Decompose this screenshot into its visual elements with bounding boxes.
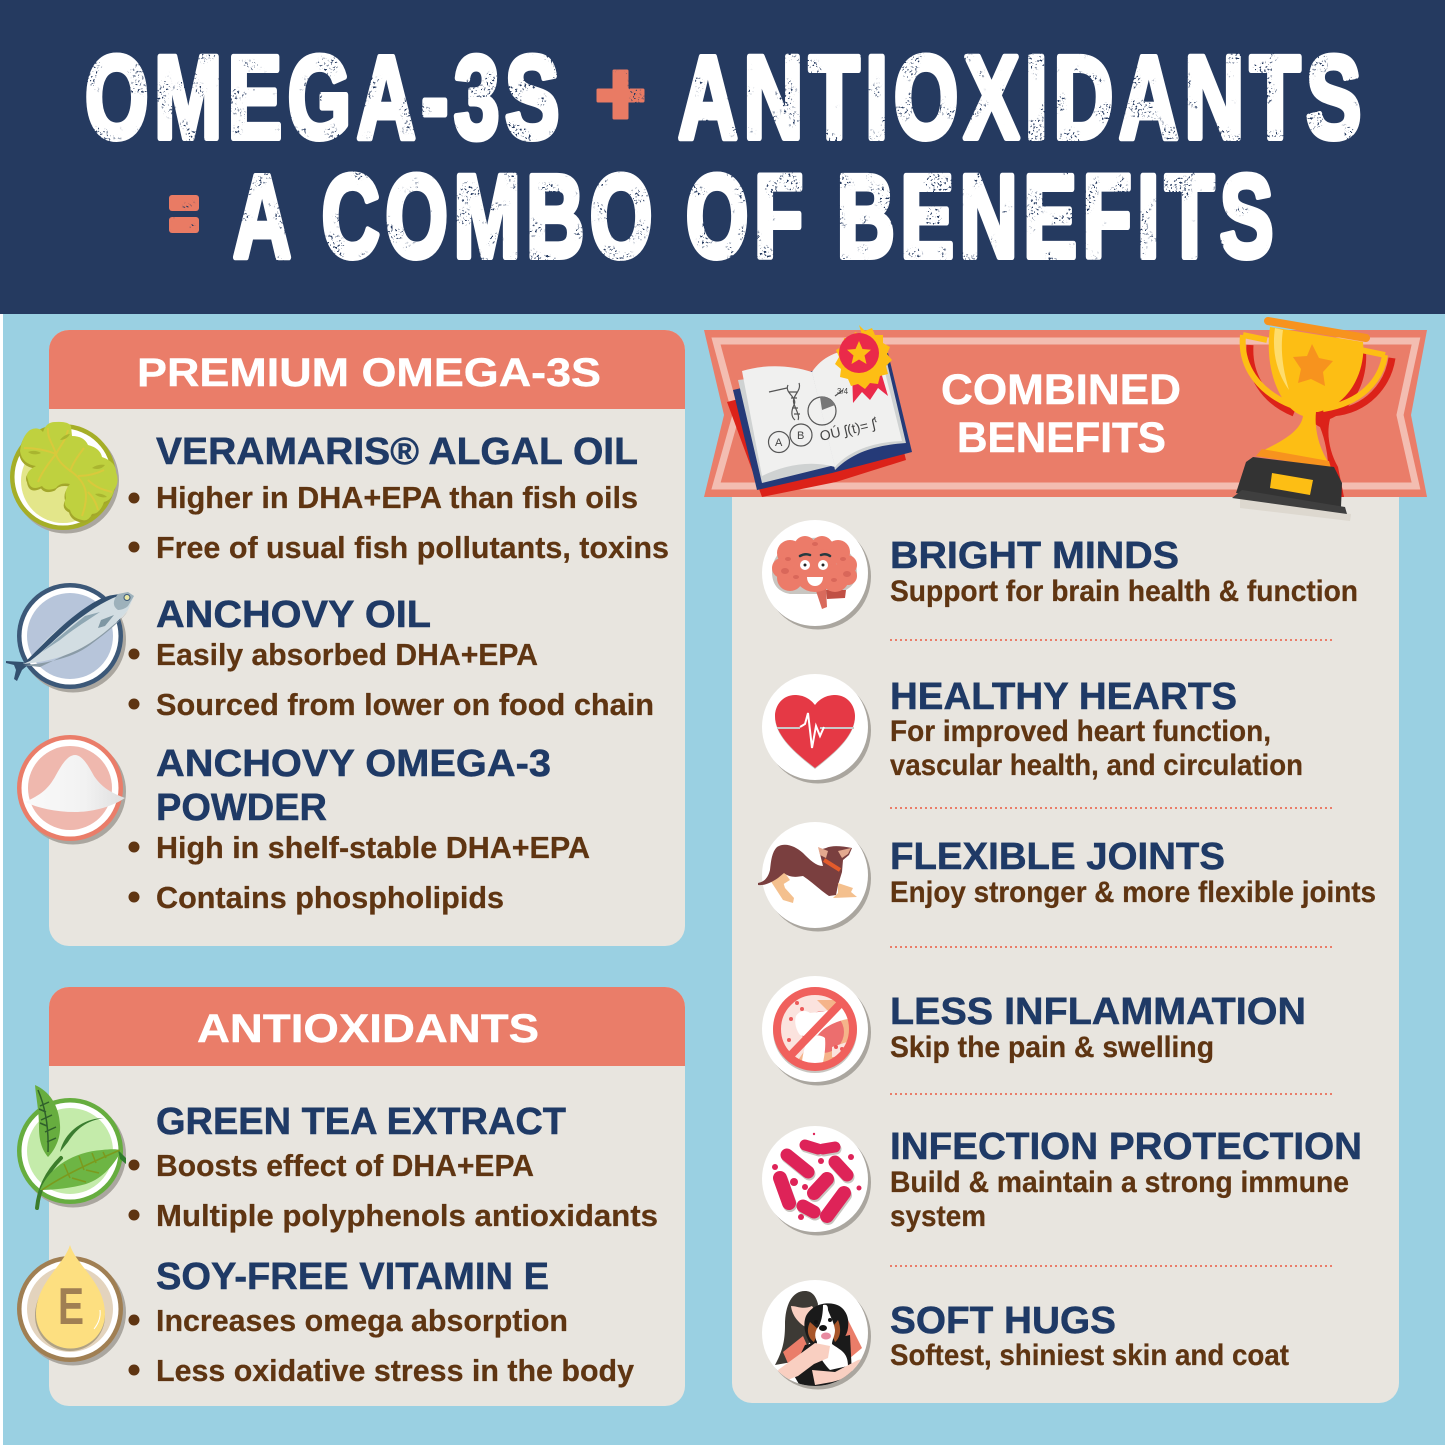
benefit: infection protection: INFECTION PROTECTION xyxy=(890,1126,1362,1168)
label: vitamin e: E xyxy=(58,1278,84,1336)
icon: heart xyxy=(762,674,871,784)
benefit: less inflammation: LESS INFLAMMATION xyxy=(890,991,1306,1033)
benefit: flexible joints xyxy=(890,836,1376,909)
item: green tea extract: Boosts effect of DHA+EPA xyxy=(156,1148,534,1183)
item: anchovy omega-3 powder: ANCHOVY OMEGA-3 xyxy=(156,743,551,785)
benefit: healthy hearts: For improved heart function, xyxy=(890,715,1271,748)
icon: omega-3 powder xyxy=(17,735,126,844)
benefit: soft hugs: Softest, shiniest skin and coat xyxy=(890,1339,1289,1372)
icon: dog stretching xyxy=(758,822,871,932)
item: green tea extract xyxy=(128,1101,658,1233)
item: soy-free vitamin e: Increases omega absorption xyxy=(156,1303,568,1338)
book formula text: 3/4 xyxy=(837,387,849,396)
benefit: flexible joints: FLEXIBLE JOINTS xyxy=(890,836,1225,878)
icon: algae xyxy=(10,422,119,534)
icon: vitamin e drop xyxy=(17,1245,126,1366)
benefit: healthy hearts xyxy=(890,676,1303,782)
item: anchovy oil: Easily absorbed DHA+EPA xyxy=(156,637,538,672)
item: anchovy omega-3 powder xyxy=(128,743,590,915)
book formula text: A xyxy=(775,437,783,449)
header band xyxy=(0,0,1445,314)
panel: premium omega-3s xyxy=(49,330,685,946)
book formula text xyxy=(775,387,880,449)
panel: combined benefits xyxy=(732,470,1399,1403)
item: anchovy omega-3 powder: Contains phospholipids xyxy=(156,880,504,915)
banner: combined benefits xyxy=(704,321,1427,521)
medal xyxy=(835,325,892,403)
item: anchovy omega-3 powder: POWDER xyxy=(156,787,327,829)
icon: green tea xyxy=(17,1085,126,1208)
benefit: infection protection: Build & maintain a strong immune xyxy=(890,1166,1349,1199)
book formula text: t xyxy=(873,414,878,424)
benefit: soft hugs xyxy=(890,1300,1289,1372)
benefit: bright minds: Support for brain health & function xyxy=(890,575,1358,608)
icon: open book with medal xyxy=(727,325,912,497)
title xyxy=(85,32,1367,283)
heading: antioxidants: ANTIOXIDANTS xyxy=(197,1007,539,1051)
item: green tea extract: GREEN TEA EXTRACT xyxy=(156,1101,566,1143)
icon: no inflammation xyxy=(762,976,871,1086)
item: anchovy oil: Sourced from lower on food chain xyxy=(156,687,654,722)
benefit: soft hugs: SOFT HUGS xyxy=(890,1300,1116,1342)
icon: bacteria xyxy=(762,1126,871,1236)
item: anchovy omega-3 powder: High in shelf-stable DHA+EPA xyxy=(156,830,590,865)
item: veramaris algal oil: Free of usual fish pollutants, toxins xyxy=(156,530,669,565)
item: veramaris algal oil: Higher in DHA+EPA than fish oils xyxy=(156,480,638,515)
item: green tea extract: Multiple polyphenols antioxidants xyxy=(156,1198,658,1233)
item: veramaris algal oil: VERAMARIS® ALGAL OIL xyxy=(156,431,638,473)
book formula text: B xyxy=(797,430,804,442)
icon: anchovy xyxy=(6,583,134,692)
banner title xyxy=(941,366,1181,462)
heading: premium omega-3s: PREMIUM OMEGA-3S xyxy=(137,351,601,395)
banner title: BENEFITS xyxy=(957,414,1166,462)
benefit: flexible joints: Enjoy stronger & more flexible joints xyxy=(890,876,1376,909)
benefit: less inflammation: Skip the pain & swelling xyxy=(890,1031,1214,1064)
book formula text: OÚ ʃ(t)= ʃ xyxy=(818,416,877,444)
benefit: infection protection xyxy=(890,1126,1362,1233)
item: anchovy oil xyxy=(128,594,654,722)
item: soy-free vitamin e xyxy=(128,1256,635,1388)
item: anchovy oil: ANCHOVY OIL xyxy=(156,594,431,636)
banner title: COMBINED xyxy=(941,366,1181,414)
benefit: less inflammation xyxy=(890,991,1306,1064)
item: veramaris algal oil xyxy=(128,431,669,565)
title: OMEGA-3S xyxy=(85,32,565,164)
benefit: bright minds: BRIGHT MINDS xyxy=(890,535,1179,577)
benefit: infection protection: system xyxy=(890,1200,986,1233)
benefit: healthy hearts: HEALTHY HEARTS xyxy=(890,676,1237,718)
benefit: healthy hearts: vascular health, and circulation xyxy=(890,749,1303,782)
item: soy-free vitamin e: Less oxidative stress in the body xyxy=(156,1353,635,1388)
panel: antioxidants xyxy=(49,987,685,1406)
icon: trophy xyxy=(1232,321,1392,521)
icon: woman hugging dog xyxy=(762,1280,871,1390)
benefit: bright minds xyxy=(890,535,1358,608)
icon: brain xyxy=(762,520,871,630)
item: soy-free vitamin e: SOY-FREE VITAMIN E xyxy=(156,1256,549,1298)
